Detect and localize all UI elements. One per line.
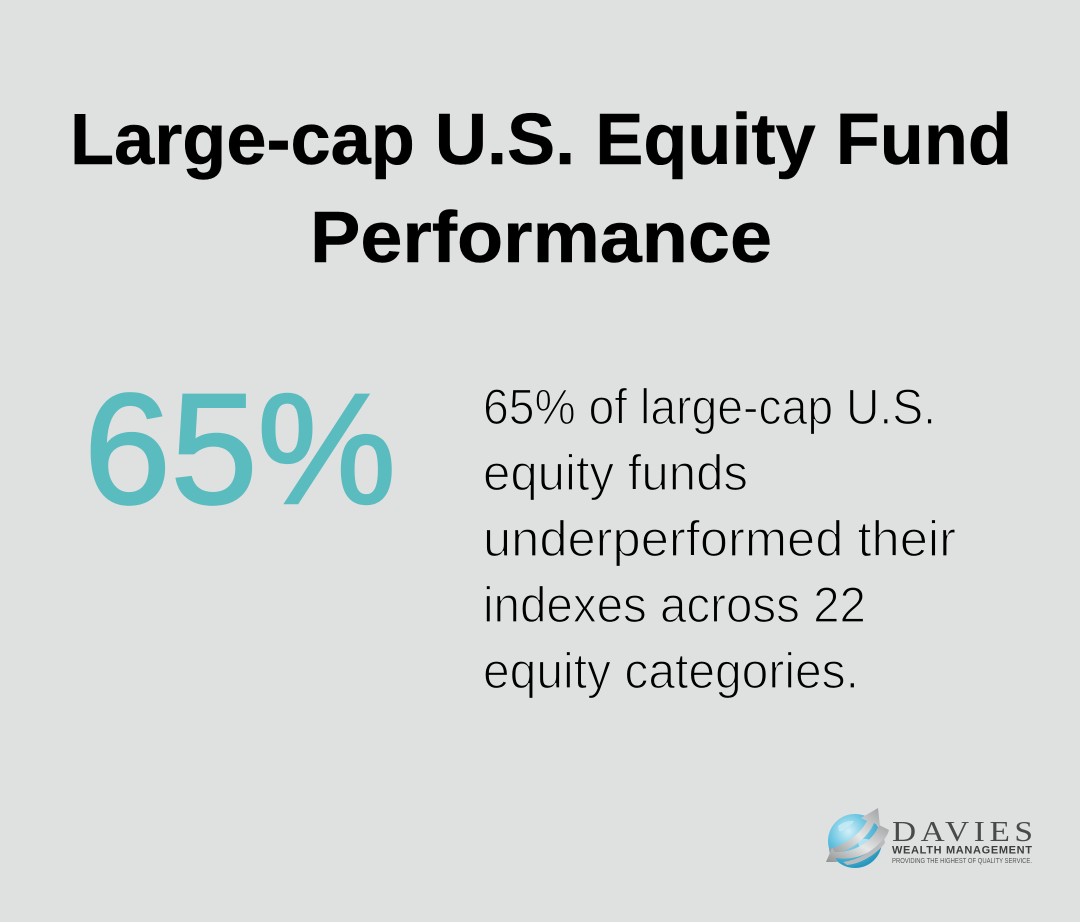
description text [483, 379, 956, 699]
logo wordmark: DAVIES [892, 815, 1033, 847]
icon: globe with arrows [826, 808, 889, 868]
description text: equity categories. [483, 643, 859, 699]
description text: equity funds [483, 445, 748, 501]
description text: indexes across 22 [483, 577, 866, 633]
logo: Davies Wealth Management [826, 808, 1033, 868]
title: Large-cap U.S. Equity Fund [70, 100, 1012, 180]
logo subtitle: WEALTH MANAGEMENT [892, 844, 1032, 856]
description text: 65% of large-cap U.S. [483, 379, 936, 435]
big statistic: 65%: 65% [84, 362, 396, 537]
title: Performance [310, 198, 772, 278]
title [70, 100, 1012, 278]
logo tagline: PROVIDING THE HIGHEST OF QUALITY SERVICE. [892, 856, 1032, 865]
description text: underperformed their [483, 511, 956, 567]
